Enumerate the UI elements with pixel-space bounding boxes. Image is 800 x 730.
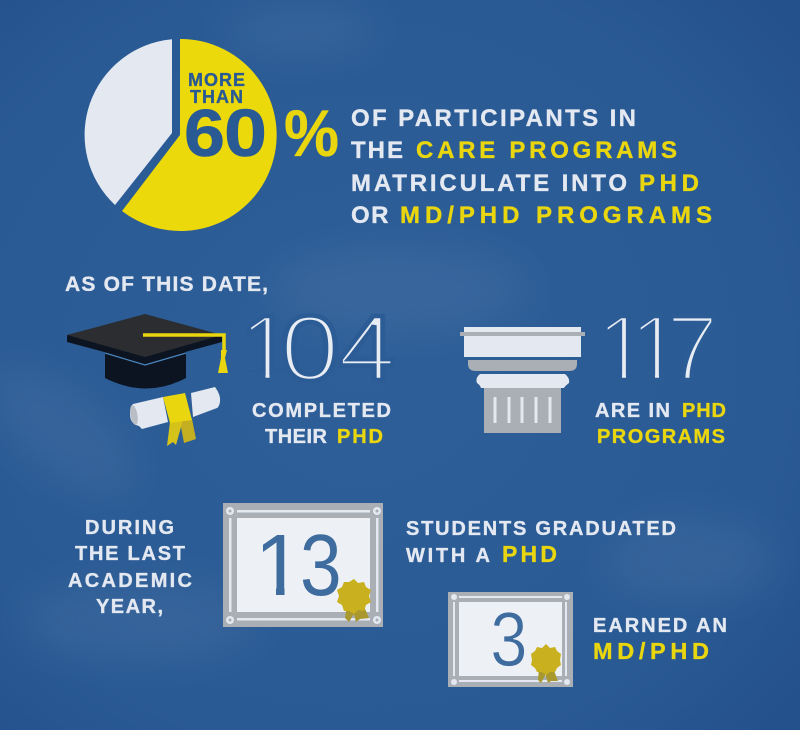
icon: seal on certificate 3 xyxy=(531,644,561,683)
text: earned an md/phd xyxy=(593,615,727,664)
number: 117 xyxy=(608,318,712,378)
headline: participants statement: PHD xyxy=(639,170,699,197)
number: 104: 4 xyxy=(338,296,396,400)
certificate: 3: 3 xyxy=(490,597,527,683)
text: are in phd programs xyxy=(595,400,726,448)
text: earned an md/phd: EARNED AN xyxy=(593,615,727,637)
text: students graduated with a phd: WITH A xyxy=(406,545,490,567)
number: 117: 7 xyxy=(666,296,718,400)
text: during the last academic year: YEAR, xyxy=(96,596,163,618)
text: students graduated with a phd xyxy=(406,518,676,567)
text: are in phd programs: PROGRAMS xyxy=(597,426,725,448)
text: students graduated with a phd: PHD xyxy=(502,541,557,567)
certificate: 13: 3 xyxy=(300,517,342,614)
number: 104 xyxy=(251,314,390,379)
pie chart: more than 60%: 0 xyxy=(224,96,267,171)
text: during the last academic year: THE LAST xyxy=(75,543,185,565)
percent sign: % xyxy=(284,96,339,170)
number: 104: 1 xyxy=(240,296,292,400)
text: during the last academic year: DURING xyxy=(85,517,174,539)
text: students graduated with a phd: STUDENTS GRADUATED xyxy=(406,518,676,540)
headline: participants statement: CARE PROGRAMS xyxy=(416,137,677,164)
text: completed their phd: COMPLETED xyxy=(252,400,391,422)
number: 117: 1 xyxy=(596,296,648,400)
text: during the last academic year: ACADEMIC xyxy=(68,570,192,592)
icon: column xyxy=(460,327,585,433)
pie chart: more than 60%: 6 xyxy=(184,96,225,171)
headline: participants statement: MD/PHD PROGRAMS xyxy=(400,202,712,229)
pie chart: more than 60%: THAN xyxy=(190,87,243,107)
pie chart: more than 60% xyxy=(85,39,277,231)
text: completed their phd: THEIR xyxy=(265,426,328,448)
headline: participants statement: THE xyxy=(351,137,403,164)
certificate: 3 xyxy=(448,592,573,687)
text: earned an md/phd: MD/PHD xyxy=(593,638,709,664)
pie chart: more than 60%: MORE xyxy=(188,70,245,90)
text: are in phd programs: ARE IN xyxy=(595,400,670,422)
number: 117: 1 xyxy=(630,296,681,400)
headline: participants statement: OF PARTICIPANTS IN xyxy=(351,105,636,132)
headline: participants statement: MATRICULATE INTO xyxy=(351,170,627,197)
number: 104: 0 xyxy=(280,296,340,400)
headline: participants statement: OR xyxy=(351,202,388,229)
text: completed their phd: PHD xyxy=(337,426,383,448)
icon: diploma scroll xyxy=(129,387,220,446)
icon: seal on certificate 13 xyxy=(337,579,371,622)
text: are in phd programs: PHD xyxy=(682,400,726,422)
certificate: 13: 1 xyxy=(255,517,303,614)
text: as of this date: AS OF THIS DATE, xyxy=(65,273,268,296)
certificate: 13 xyxy=(223,503,383,627)
headline: participants statement xyxy=(351,105,712,229)
icon: graduation cap xyxy=(67,314,228,388)
text: during the last academic year xyxy=(68,517,192,618)
text: completed their phd xyxy=(252,400,391,448)
